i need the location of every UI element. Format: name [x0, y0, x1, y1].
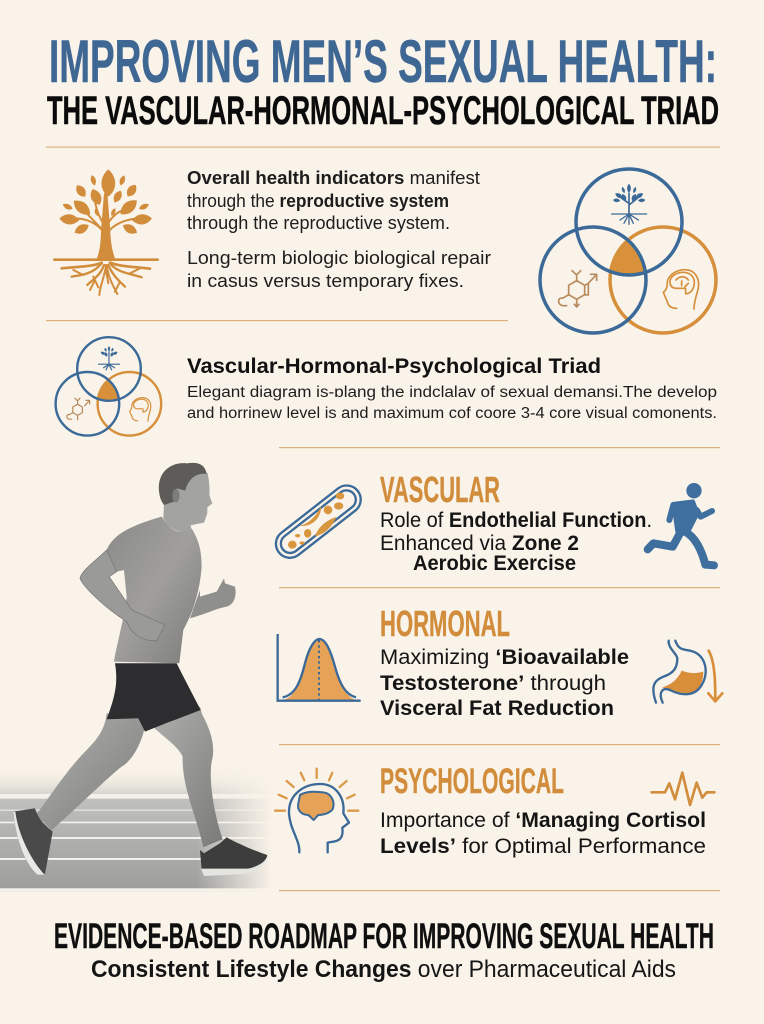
text block: overall health: Overall health indicators manifest — [187, 168, 480, 188]
front shoe — [200, 837, 267, 876]
triad venn diagram large — [540, 169, 716, 333]
rear shoe — [13, 808, 53, 875]
text block: overall health: through the reproductive system. — [187, 213, 450, 233]
hormonal section text: Maximizing ‘Bioavailable — [380, 646, 629, 669]
icon: bell curve chart — [278, 634, 361, 701]
vascular section text — [380, 469, 652, 575]
psychological section text: Levels’ for Optimal Performance — [380, 835, 706, 858]
ear — [172, 489, 180, 502]
psychological section text: Importance of ‘Managing Cortisol — [380, 809, 706, 832]
icon: blood vessel — [270, 480, 366, 563]
text block: overall health: in casus versus temporary fixes. — [187, 271, 464, 291]
vascular section text: VASCULAR — [380, 469, 500, 510]
shorts — [107, 663, 201, 732]
icon: small brain in head — [130, 398, 151, 421]
triad heading and description — [187, 354, 717, 422]
icon: head with brain — [275, 769, 358, 852]
icon: running person — [648, 483, 714, 565]
triad venn diagram small — [56, 337, 161, 436]
title — [47, 28, 719, 133]
hair — [159, 463, 207, 505]
text block: overall health: Long-term biologic biological repair — [187, 248, 491, 268]
triad heading and description: and horrinew level is and maximum cof coore 3-4 core visual comonents. — [187, 405, 717, 422]
psychological section text — [380, 762, 706, 858]
hormonal section text — [380, 603, 629, 720]
triad heading and description: Vascular-Hormonal-Psychological Triad — [187, 354, 601, 378]
running track — [0, 780, 265, 892]
icon: blue tree — [612, 184, 647, 224]
footer — [54, 917, 714, 983]
icon: stomach with down arrow — [653, 641, 722, 703]
icon: pulse line — [652, 773, 714, 805]
shirt — [107, 517, 202, 663]
icon: small molecule — [67, 398, 90, 420]
rear leg — [36, 713, 147, 830]
vascular section text: Enhanced via Zone 2 — [380, 532, 579, 555]
hormonal section text: Testosterone’ through — [380, 672, 606, 695]
neck and face — [163, 473, 212, 533]
vascular section text: Aerobic Exercise — [413, 552, 576, 575]
front leg — [143, 707, 223, 847]
triad heading and description: Elegant diagram is-ɒlang the indclalav of sexual demansi.The develop — [187, 384, 717, 401]
psychological section text: PSYCHOLOGICAL — [380, 762, 564, 801]
footer: Consistent Lifestyle Changes over Pharmaceutical Aids — [91, 956, 676, 983]
front arm — [190, 578, 236, 618]
runner photo — [13, 463, 267, 876]
text block: overall health — [187, 168, 491, 291]
vascular section text: Role of Endothelial Function. — [380, 509, 652, 532]
rear arm — [80, 550, 165, 641]
icon: brain in head — [663, 270, 699, 309]
icon: small blue tree — [99, 346, 120, 370]
hormonal section text: HORMONAL — [380, 603, 510, 644]
icon: orange tree with roots — [54, 169, 158, 295]
hormonal section text: Visceral Fat Reduction — [380, 697, 614, 720]
icon: molecule with arrow — [559, 271, 597, 307]
text block: overall health: through the reproductive system — [187, 191, 449, 211]
